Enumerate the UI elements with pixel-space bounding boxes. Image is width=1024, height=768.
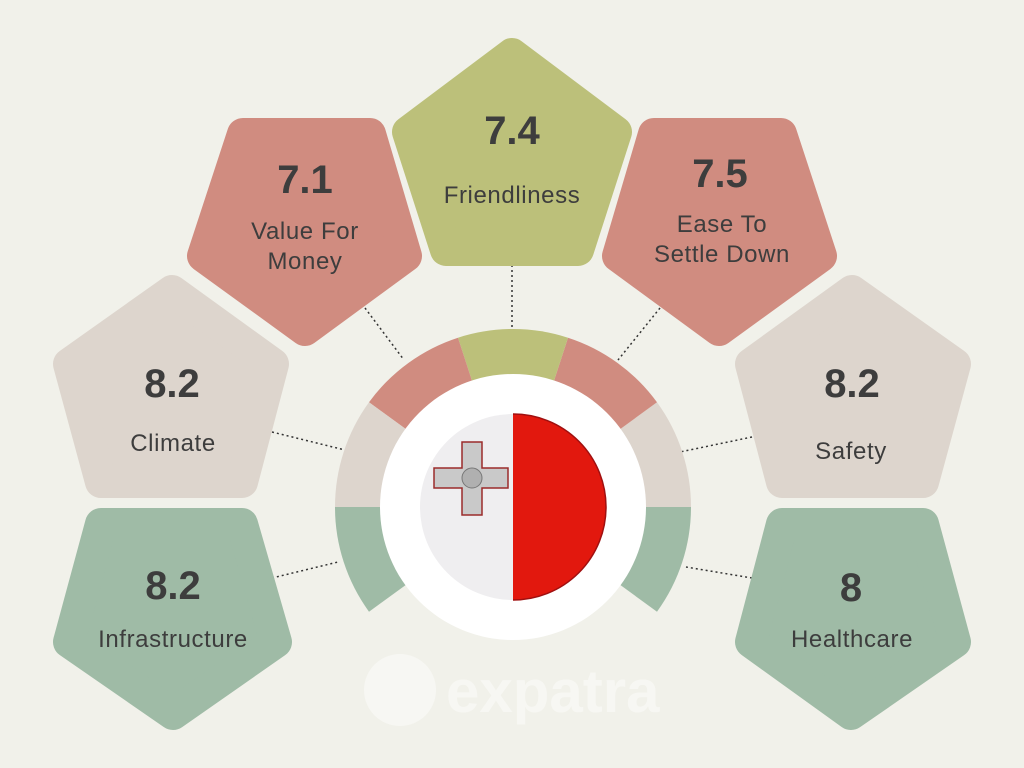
panel: Safety [751,291,955,482]
panel: Healthcare: Healthcare [791,626,913,653]
connector lines [272,265,752,578]
panel: Infrastructure [69,524,276,714]
panel: Climate: 8.2 [144,362,200,406]
panel: Safety: 8.2 [824,362,880,406]
panel: Ease To Settle Down: Settle Down [654,241,790,268]
panel: Safety: Safety [815,438,887,465]
panel: Infrastructure: Infrastructure [98,626,248,653]
watermark logo: expatra [446,658,660,725]
panel: Value For Money: 7.1 [277,158,333,202]
panel: Ease To Settle Down [618,134,821,330]
ring chart [335,329,691,640]
panel: Value For Money: Value For [251,218,359,245]
panel: Climate: Climate [130,430,216,457]
panel: Value For Money: Money [267,248,343,275]
panel: Ease To Settle Down: Ease To [677,211,767,238]
panel: Healthcare: 8 [840,566,862,610]
panel: Value For Money [203,134,406,330]
panel: Friendliness [408,54,616,250]
panel: Infrastructure: 8.2 [145,564,201,608]
watermark logo [364,654,660,726]
panel: Climate [69,291,273,482]
Malta flag [418,412,615,602]
panel: Friendliness: Friendliness [444,182,580,209]
panel: Healthcare [751,524,955,714]
panel: Friendliness: 7.4 [484,109,541,153]
panel: Ease To Settle Down: 7.5 [692,152,748,196]
